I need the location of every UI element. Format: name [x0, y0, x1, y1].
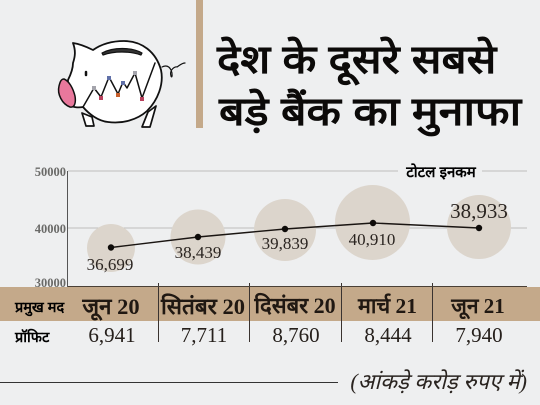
profit values: 6,941 — [88, 323, 136, 347]
data values — [87, 199, 508, 274]
axis labels: 50000 — [35, 165, 66, 179]
column headers — [81, 292, 505, 321]
table — [0, 283, 540, 347]
profit values: 8,760 — [272, 323, 320, 347]
chart label: टोटल इनकम — [405, 163, 477, 181]
column headers: जून 21 — [450, 294, 505, 320]
footer rule — [0, 382, 338, 384]
axis labels: 40000 — [35, 222, 66, 236]
column dividers — [158, 283, 432, 342]
column headers: जून 20 — [81, 294, 140, 321]
axis labels: 30000 — [35, 276, 66, 290]
column headers: मार्च 21 — [357, 293, 417, 318]
row label: main item: प्रमुख मद — [14, 300, 65, 317]
data values: 39,839 — [262, 234, 308, 253]
data values: 36,699 — [87, 255, 133, 274]
data points — [108, 220, 482, 251]
accent bar — [196, 0, 203, 128]
title — [216, 36, 523, 137]
data values: 40,910 — [349, 230, 395, 249]
trend line — [111, 223, 479, 248]
table header band — [0, 287, 540, 321]
profit values: 7,940 — [455, 323, 503, 347]
title: देश के दूसरे सबसे — [216, 36, 498, 86]
icon: piggy bank with chart — [59, 41, 185, 127]
axis labels — [35, 165, 66, 290]
profit values: 8,444 — [364, 323, 412, 347]
column headers: सितंबर 20 — [160, 293, 245, 319]
data values: 38,439 — [175, 243, 221, 262]
data values: 38,933 — [450, 199, 508, 223]
column headers: दिसंबर 20 — [253, 292, 336, 318]
profit values: 7,711 — [181, 323, 227, 347]
gridlines and axis — [68, 171, 527, 228]
chart: total income bubbles — [35, 163, 527, 290]
bubbles — [87, 185, 511, 272]
row label: profit: प्रॉफिट — [14, 328, 50, 346]
profit values — [88, 323, 503, 347]
title: बड़े बैंक का मुनाफा — [218, 88, 523, 137]
unit note: (आंकड़े करोड़ रुपए में) — [350, 369, 527, 394]
